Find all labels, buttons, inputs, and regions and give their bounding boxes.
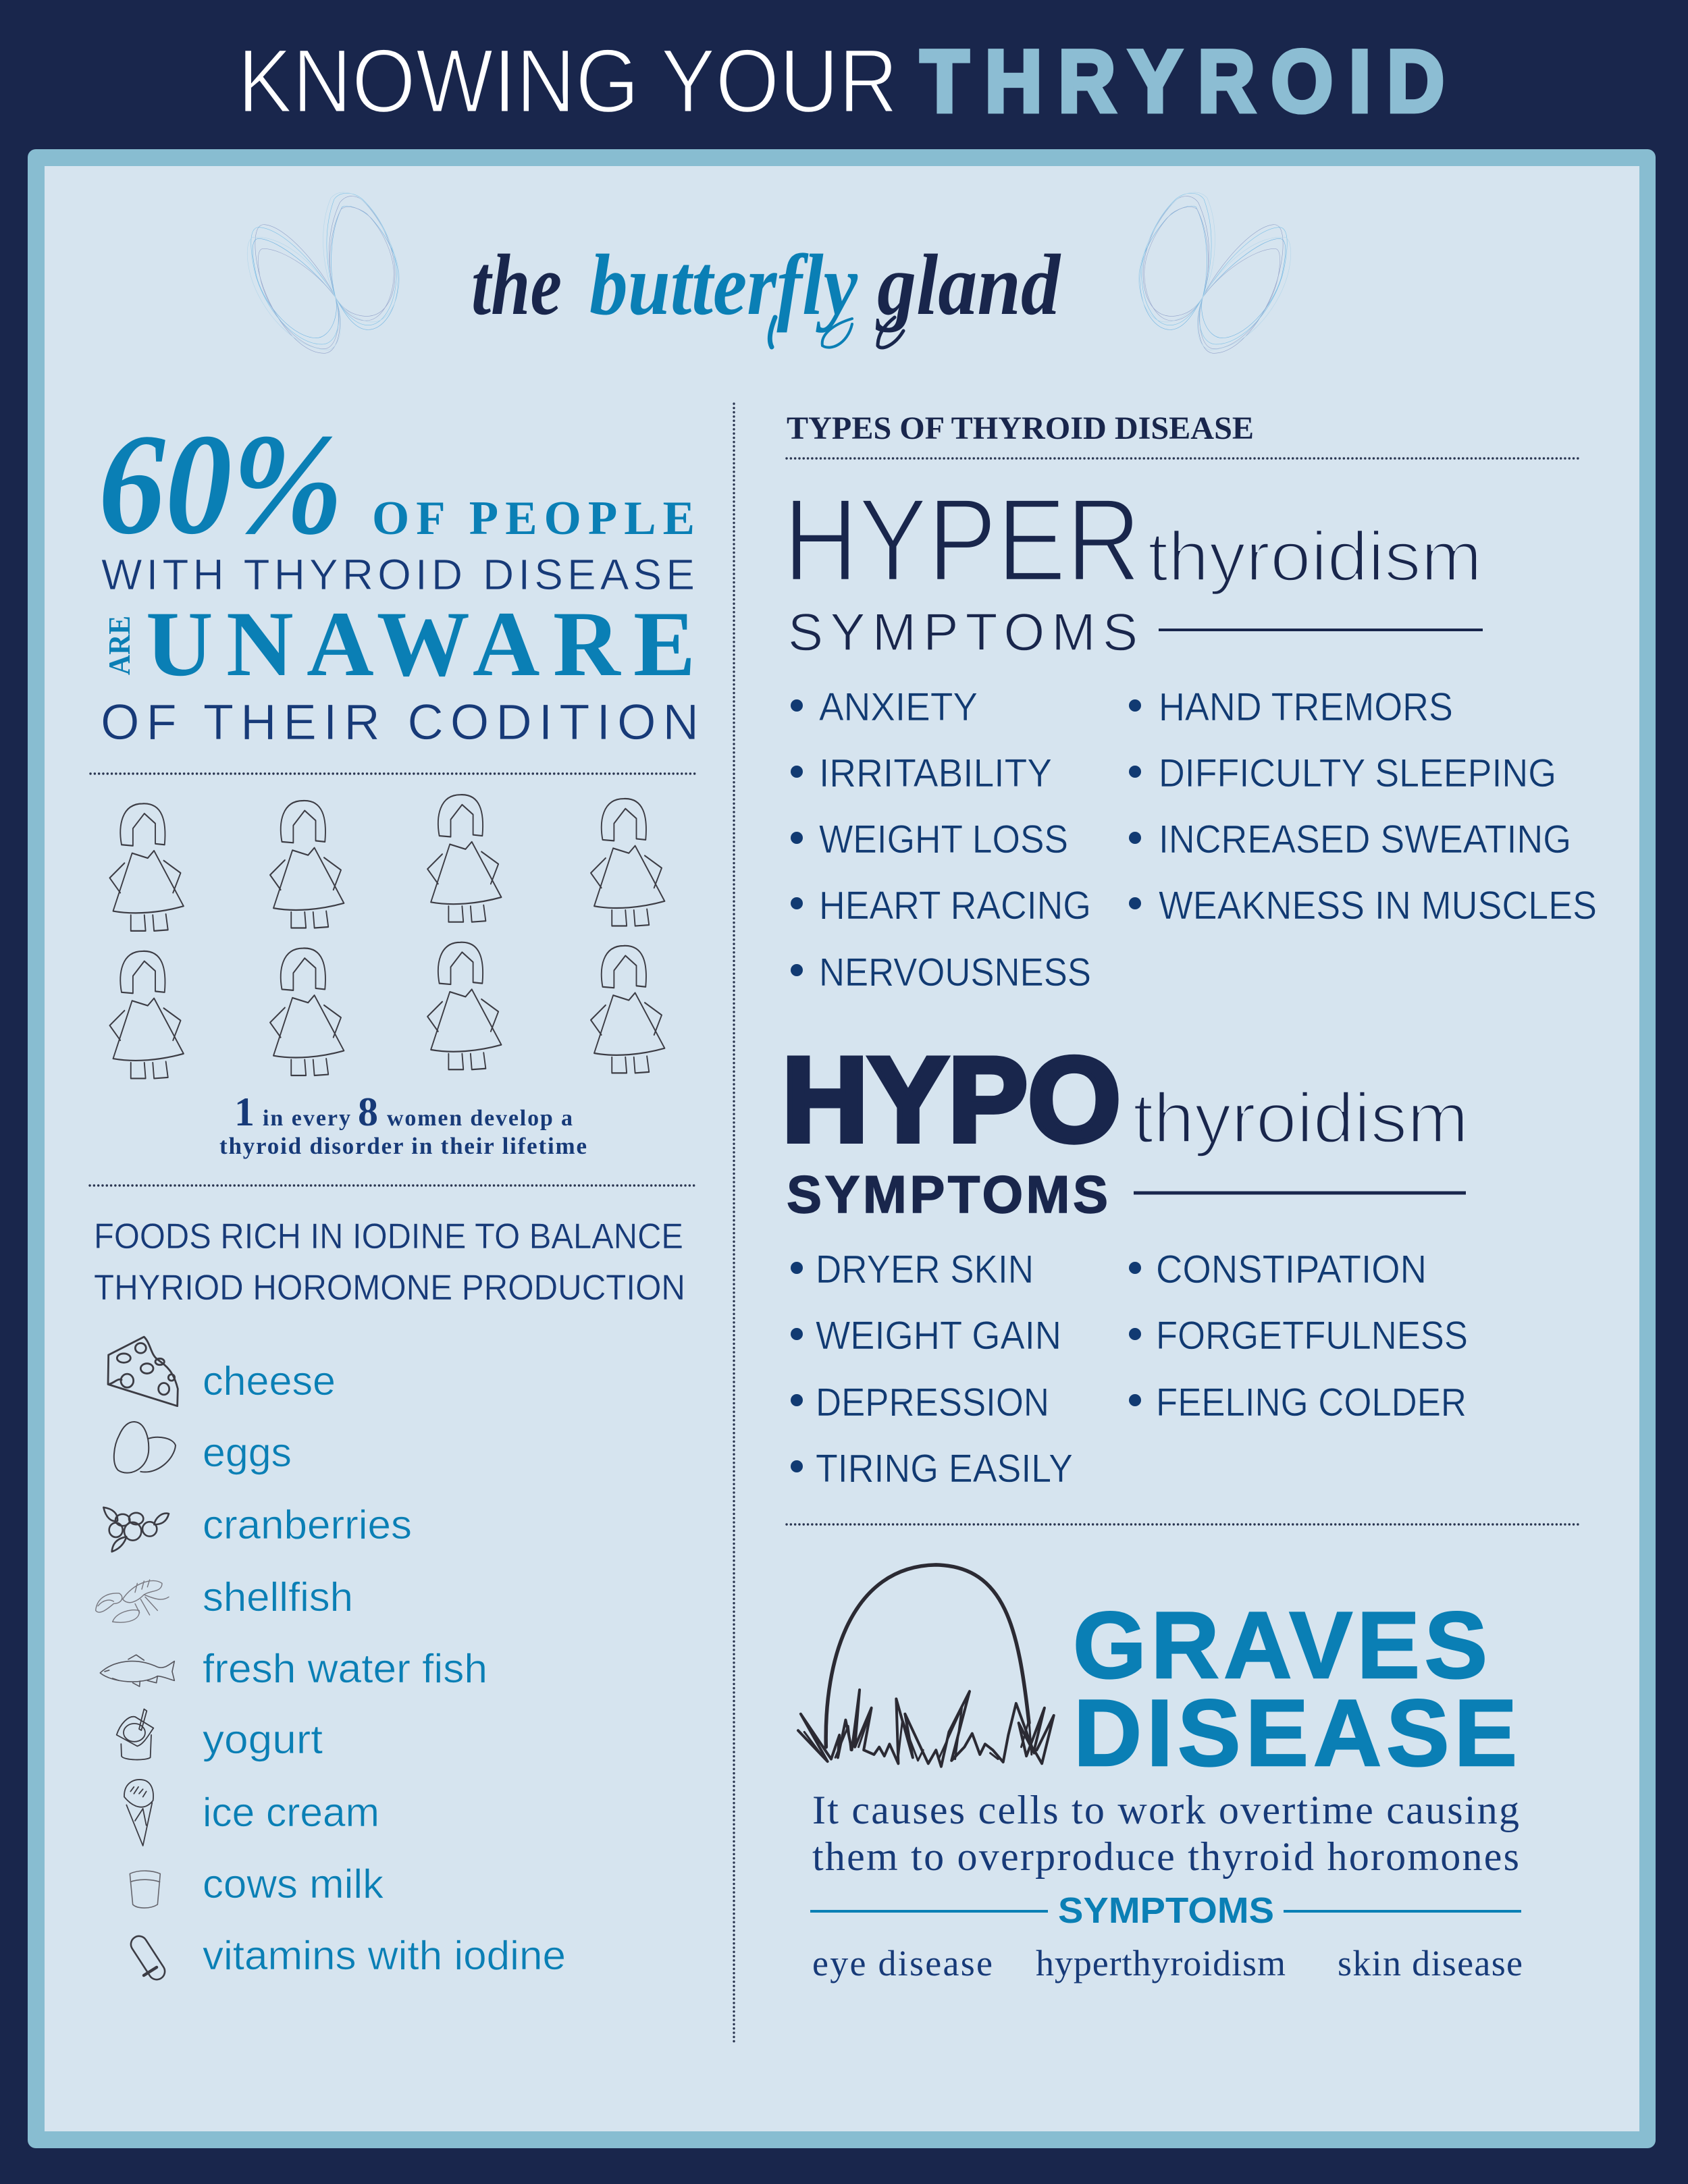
- with thyroid disease: WITH THYROID DISEASE: [101, 550, 695, 599]
- hypo heading: HYPO: [782, 1032, 1121, 1167]
- icon: gravestone and grass: [798, 1565, 1054, 1767]
- icon: yogurt: [117, 1709, 153, 1760]
- graves symptoms heading: SYMPTOMS: [1058, 1890, 1274, 1931]
- hyper symptom list: ANXIETY: [819, 685, 978, 729]
- graves description: them to overproduce thyroid horomones: [812, 1834, 1519, 1879]
- title: thyroid: THRYROID: [920, 33, 1444, 130]
- icon: vitamin pill: [128, 1933, 168, 1983]
- caption: 1 in 8 women: in every: [263, 1106, 350, 1131]
- are: ARE: [102, 616, 136, 675]
- graves heading: GRAVES: [1073, 1592, 1487, 1698]
- icon: woman: [270, 801, 344, 928]
- panel: statistic: [99, 404, 699, 750]
- unaware: UNAWARE: [146, 592, 695, 695]
- food icons: [96, 1337, 178, 1908]
- icon: woman: [109, 951, 184, 1078]
- food labels: cranberries: [203, 1502, 412, 1547]
- graves description: [812, 1788, 1519, 1879]
- hyper symptom list: WEIGHT LOSS: [819, 818, 1068, 861]
- caption: 1 in 8 women: [219, 1090, 587, 1159]
- icon: ice cream: [124, 1780, 153, 1846]
- title: [238, 31, 1444, 132]
- hyper symptom list: [791, 685, 1597, 994]
- hypo thyroidism: thyroidism: [1133, 1079, 1469, 1158]
- food labels: cheese: [203, 1358, 336, 1404]
- script heading: the: [471, 237, 562, 334]
- food labels: fresh water fish: [203, 1646, 487, 1691]
- hypo symptom list: FORGETFULNESS: [1156, 1314, 1468, 1358]
- hyper symptom list: INCREASED SWEATING: [1159, 818, 1571, 861]
- hyper symptom list: IRRITABILITY: [819, 751, 1052, 795]
- panel: foods: [94, 1217, 685, 1983]
- icon: woman: [591, 946, 664, 1073]
- panel: graves disease: [798, 1565, 1523, 1983]
- foods heading: FOODS RICH IN IODINE TO BALANCE: [94, 1217, 683, 1256]
- hypo symptom list: FEELING COLDER: [1156, 1381, 1467, 1424]
- 60 percent: 60%: [99, 404, 343, 564]
- hyper symptom list: WEAKNESS IN MUSCLES: [1159, 884, 1597, 928]
- icon: cheese: [108, 1337, 178, 1406]
- food labels: shellfish: [203, 1574, 353, 1620]
- icon: cranberries: [103, 1508, 169, 1551]
- hyper heading: HYPER: [783, 475, 1141, 606]
- graves symptoms list: skin disease: [1338, 1943, 1523, 1983]
- icon: eggs: [114, 1422, 176, 1473]
- panel: types of thyroid disease: [782, 410, 1597, 1524]
- hypo symptom list: [791, 1248, 1468, 1491]
- food labels: cows milk: [203, 1861, 384, 1907]
- icon: woman: [109, 803, 184, 931]
- pictogram: women: [109, 795, 664, 1078]
- script heading: gland: [875, 237, 1061, 334]
- types heading: TYPES OF THYROID DISEASE: [787, 410, 1254, 446]
- food labels: eggs: [203, 1430, 292, 1475]
- caption: 1 in 8 women: 8: [358, 1090, 378, 1134]
- icon: woman: [427, 942, 501, 1069]
- hypo symptom list: WEIGHT GAIN: [816, 1314, 1061, 1358]
- script heading: butterfly: [589, 237, 858, 334]
- hyper symptom list: HEART RACING: [819, 884, 1091, 928]
- title: knowing your: KNOWING YOUR: [238, 31, 898, 132]
- hypo symptoms: SYMPTOMS: [787, 1165, 1108, 1224]
- of their codition: OF THEIR CODITION: [101, 694, 699, 750]
- icon: woman: [591, 799, 664, 926]
- hyper symptom list: NERVOUSNESS: [819, 951, 1091, 994]
- food labels: [203, 1358, 566, 1978]
- icon: woman: [270, 948, 344, 1075]
- icon: right butterfly: [1138, 192, 1291, 353]
- caption: 1 in 8 women: women develop a: [387, 1106, 573, 1131]
- hypo symptom list: DRYER SKIN: [816, 1248, 1034, 1291]
- script heading: [471, 237, 1061, 348]
- script flourishes: [770, 317, 903, 348]
- foods heading: THYRIOD HOROMONE PRODUCTION: [94, 1268, 685, 1308]
- icon: fish: [100, 1655, 174, 1686]
- hypo symptom list: DEPRESSION: [816, 1381, 1049, 1424]
- icon: shellfish: [96, 1580, 169, 1622]
- graves symptoms list: eye disease: [812, 1943, 993, 1983]
- food labels: ice cream: [203, 1790, 379, 1835]
- hyper symptom list: DIFFICULTY SLEEPING: [1159, 751, 1556, 795]
- graves symptoms list: [812, 1943, 1523, 1983]
- hyper symptoms: SYMPTOMS: [788, 602, 1138, 662]
- butterfly gland heading: [247, 192, 1291, 353]
- icon: woman: [427, 795, 501, 922]
- caption: 1 in 8 women: thyroid disorder in their lifetime: [219, 1133, 587, 1159]
- disease heading: DISEASE: [1074, 1680, 1517, 1786]
- hypo symptom list: TIRING EASILY: [816, 1447, 1073, 1491]
- graves symptoms list: hyperthyroidism: [1036, 1943, 1286, 1983]
- hypo symptom list: CONSTIPATION: [1156, 1248, 1427, 1291]
- hyper symptom list: HAND TREMORS: [1159, 685, 1453, 729]
- icon: left butterfly: [247, 192, 400, 353]
- foods heading: [94, 1217, 685, 1308]
- caption: 1 in 8 women: 1: [234, 1090, 255, 1134]
- food labels: vitamins with iodine: [203, 1933, 566, 1978]
- graves description: It causes cells to work overtime causing: [812, 1788, 1519, 1832]
- column divider: [733, 404, 735, 2043]
- hyper thyroidism: thyroidism: [1148, 518, 1482, 596]
- icon: cows milk: [130, 1871, 160, 1908]
- of people: OF PEOPLE: [372, 492, 695, 545]
- food labels: yogurt: [203, 1717, 323, 1762]
